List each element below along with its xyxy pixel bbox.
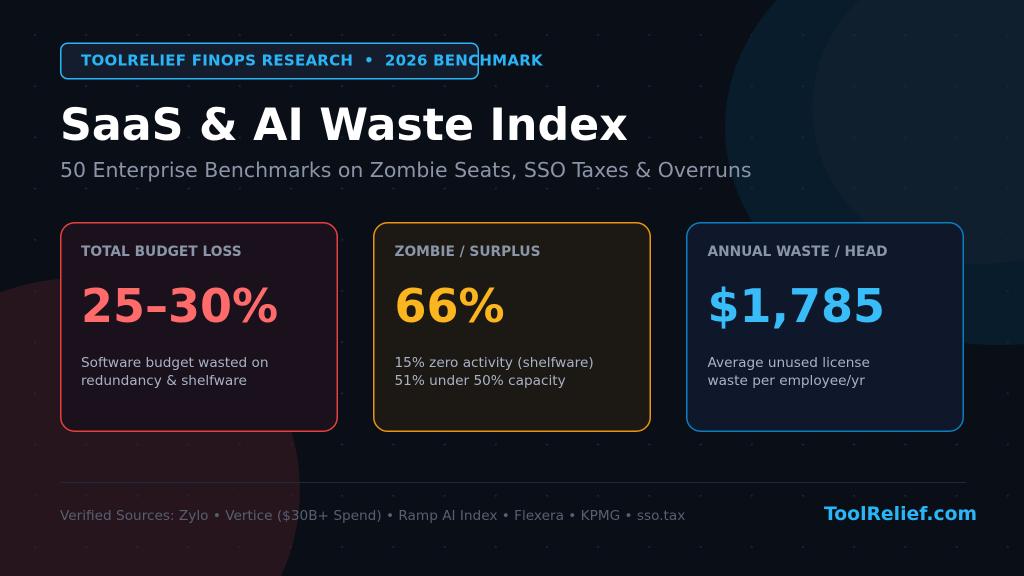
footer sources: Verified Sources: Zylo • Vertice ($30B+ Spend) • Ramp AI Index • Flexera • KPMG • sso.tax — [60, 508, 685, 524]
subtitle: 50 Enterprise Benchmarks on Zombie Seats, SSO Taxes & Overruns — [60, 158, 752, 182]
card description: waste per employee/yr — [708, 373, 865, 389]
card label: TOTAL BUDGET LOSS — [81, 244, 242, 260]
panel: zombie surplus — [374, 223, 650, 431]
panel: annual waste per head — [687, 223, 963, 431]
card description: Average unused license — [708, 355, 870, 371]
footer brand: ToolRelief.com — [824, 504, 977, 525]
card value: $1,785 — [708, 279, 885, 333]
panel: total budget loss — [61, 223, 337, 431]
background blob: large blue ellipse — [725, 0, 1024, 345]
card label: ZOMBIE / SURPLUS — [394, 244, 540, 260]
title: SaaS & AI Waste Index — [60, 100, 628, 151]
card description: 51% under 50% capacity — [394, 373, 566, 389]
card value: 25–30% — [81, 279, 278, 333]
background blob: inner blue ellipse — [812, 0, 1024, 264]
card label: ANNUAL WASTE / HEAD — [708, 244, 888, 260]
card description: Software budget wasted on — [81, 355, 269, 371]
card description: 15% zero activity (shelfware) — [394, 355, 594, 371]
background blob: red ellipse — [0, 278, 300, 576]
badge: TOOLRELIEF FINOPS RESEARCH • 2026 BENCHMARK — [81, 52, 544, 70]
card value: 66% — [394, 279, 505, 333]
badge — [61, 43, 544, 79]
card description: redundancy & shelfware — [81, 373, 247, 389]
